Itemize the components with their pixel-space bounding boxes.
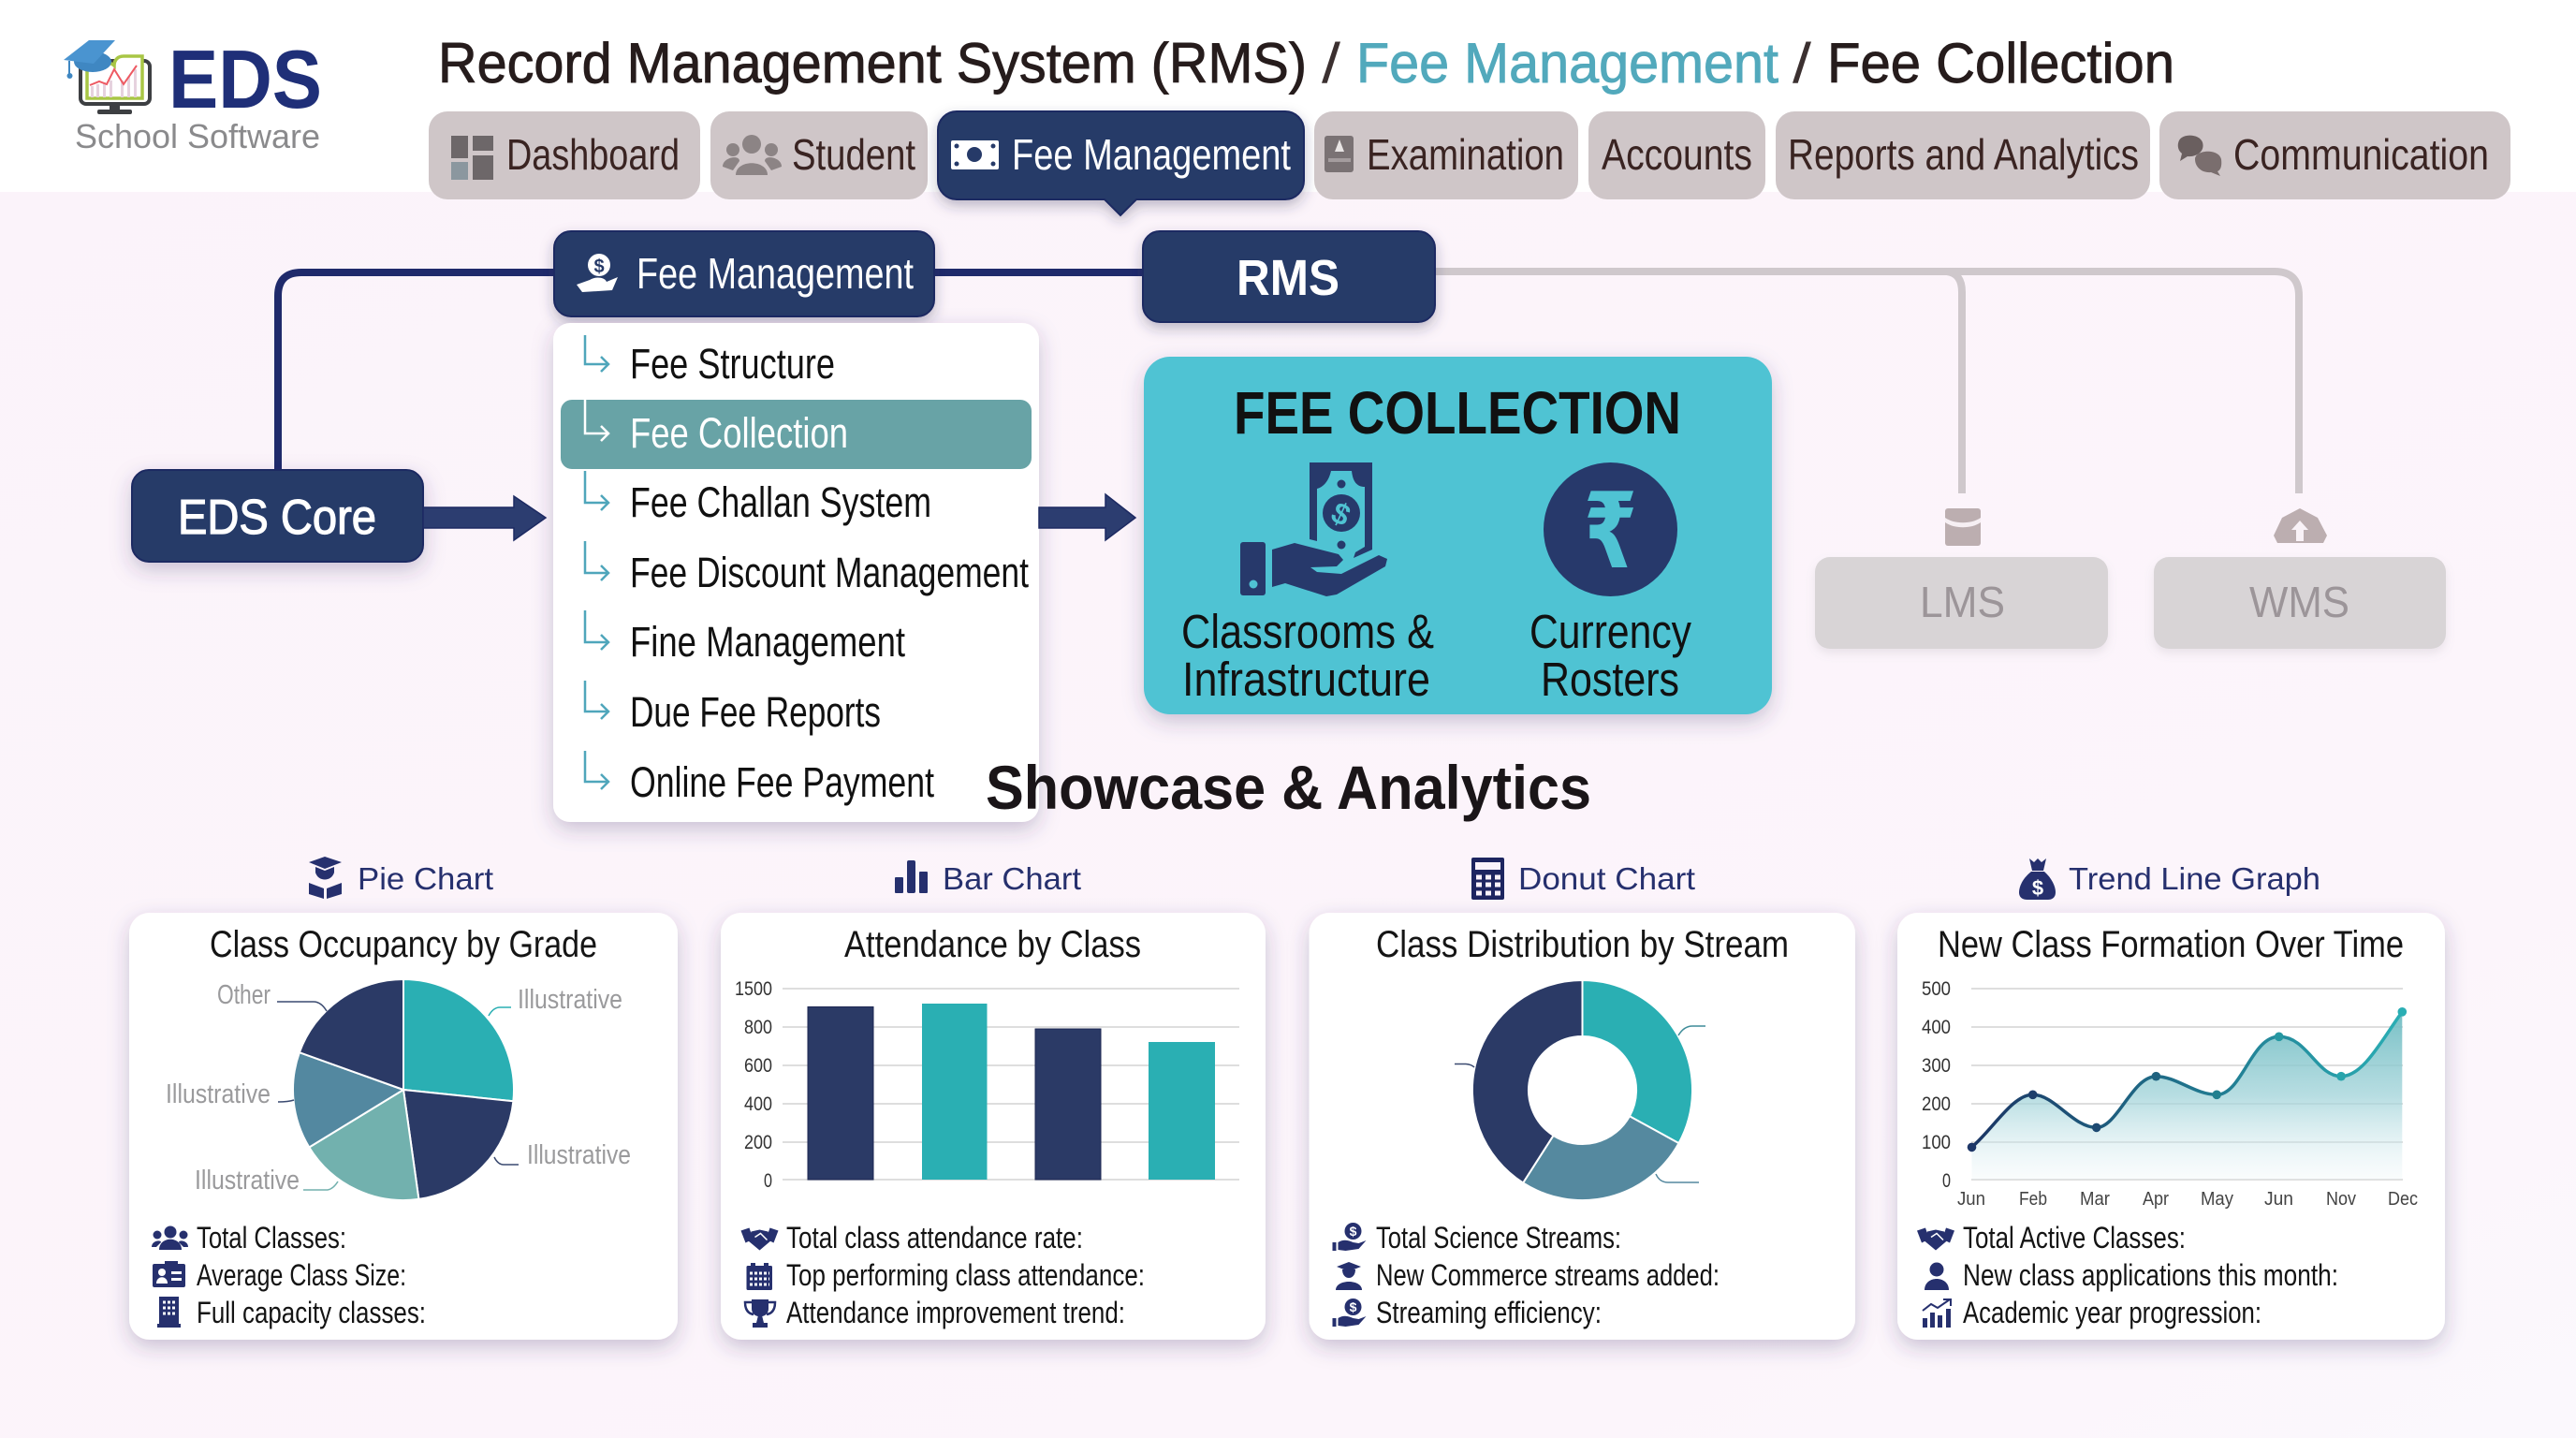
icon: calendar	[747, 1263, 772, 1290]
icon: WMS cloud upload	[2274, 508, 2327, 543]
logo wordmark: EDS	[168, 33, 322, 125]
chart title: Class Occupancy by Grade	[210, 924, 597, 965]
icon: hand holding banknote	[1240, 462, 1387, 596]
panel: fee menu	[553, 323, 1039, 822]
pie labels: Illustrative	[518, 985, 622, 1015]
icon: rupee coin: ₹	[1584, 471, 1637, 593]
icon: handshake	[1917, 1228, 1954, 1251]
tab: Communication: Communication	[2233, 130, 2489, 179]
tab: Reports and Analytics	[1776, 111, 2150, 199]
icon: hand with coin	[577, 254, 618, 292]
line chart: 200	[1922, 1093, 1951, 1115]
stats list	[786, 1221, 1145, 1329]
node: RMS	[1143, 231, 1435, 322]
node: LMS: LMS	[1920, 578, 2005, 626]
connector: RMS to LMS and WMS	[1435, 271, 2299, 493]
stats list: New class applications this month:	[1963, 1258, 2338, 1292]
icon: LMS wallet	[1945, 508, 1981, 546]
stats list: Attendance improvement trend:	[786, 1296, 1125, 1329]
pie labels: Other	[217, 980, 271, 1010]
line chart: May	[2201, 1189, 2233, 1210]
title breadcrumb	[438, 32, 2174, 95]
icon: growth chart	[1923, 1299, 1951, 1328]
title breadcrumb: Fee Management	[1356, 32, 1778, 95]
line chart: 500	[1922, 978, 1951, 1000]
stats list: Streaming efficiency:	[1376, 1296, 1602, 1329]
node: EDS Core: EDS Core	[178, 491, 376, 545]
line chart: 300	[1922, 1055, 1951, 1077]
pie labels: Illustrative	[166, 1079, 271, 1109]
icon: trophy	[745, 1299, 775, 1328]
caption: Bar Chart: Bar Chart	[943, 861, 1081, 896]
stats list: Total Classes:	[197, 1221, 346, 1255]
stats list: Top performing class attendance:	[786, 1258, 1145, 1292]
header band	[0, 0, 2576, 192]
donut chart	[1472, 980, 1692, 1200]
icon: handshake	[741, 1228, 779, 1251]
label: Classrooms and Infrastructure	[1181, 605, 1434, 706]
stats list: Total Active Classes:	[1963, 1221, 2186, 1255]
tab: Student	[710, 111, 928, 199]
bar chart	[735, 978, 1239, 1192]
panel: Class Distribution by Stream	[1309, 913, 1855, 1340]
chart title: Attendance by Class	[844, 924, 1141, 965]
icon: rupee coin	[1544, 462, 1677, 596]
navigation tabs	[429, 111, 2510, 215]
line chart: Jun	[2264, 1189, 2293, 1210]
icon: calculator	[1471, 858, 1504, 900]
menu item: Fee Discount Management: Fee Discount Management	[630, 549, 1029, 596]
menu item: Online Fee Payment: Online Fee Payment	[630, 758, 934, 806]
stats list	[197, 1221, 426, 1329]
bar chart: 0	[764, 1170, 772, 1192]
menu item: Fee Collection: Fee Collection	[630, 409, 848, 457]
icon: person	[1925, 1262, 1949, 1290]
stats list: Total class attendance rate:	[786, 1221, 1083, 1255]
chart title: New Class Formation Over Time	[1938, 924, 2404, 965]
menu highlight: Fee Collection	[561, 400, 1032, 469]
icon: group of people	[152, 1226, 188, 1250]
pie leader lines	[277, 1002, 519, 1190]
stats list	[1963, 1221, 2338, 1329]
icon: money bag	[2019, 858, 2056, 900]
caption: Trend Line Graph: Trend Line Graph	[2069, 861, 2320, 896]
arrow: EDS Core to menu	[423, 496, 546, 540]
icon: hand with coin: $	[1350, 1224, 1357, 1239]
title breadcrumb: /	[1793, 32, 1811, 95]
line chart: Apr	[2143, 1189, 2169, 1210]
panel: New Class Formation Over Time	[1897, 913, 2445, 1340]
label: Currency Rosters: Currency	[1530, 605, 1691, 658]
bar chart: 800	[744, 1017, 772, 1038]
tab: Examination: Examination	[1367, 130, 1564, 179]
title breadcrumb: /	[1322, 32, 1340, 95]
icon: hand with coin: $	[1350, 1299, 1357, 1314]
panel: Attendance by Class	[721, 913, 1266, 1340]
bar chart: 1500	[735, 978, 772, 1000]
icon: hand with coin: $	[593, 257, 605, 277]
tab: Accounts: Accounts	[1602, 130, 1752, 179]
menu item: Fee Challan System	[585, 471, 931, 526]
menu item: Fee Challan System: Fee Challan System	[630, 478, 931, 526]
tab: Communication	[2159, 111, 2510, 199]
node: WMS: WMS	[2249, 578, 2349, 626]
line chart: Feb	[2019, 1189, 2047, 1210]
tab: Dashboard	[429, 111, 700, 199]
heading: FEE COLLECTION	[1234, 379, 1681, 447]
tab: Dashboard: Dashboard	[506, 130, 680, 179]
bar chart: 400	[744, 1093, 772, 1115]
logo: EDS School Software	[64, 33, 322, 155]
icon: hand with coin	[1333, 1223, 1367, 1251]
icon: building	[157, 1297, 181, 1328]
line chart: Mar	[2080, 1189, 2110, 1210]
chart title: Class Distribution by Stream	[1376, 924, 1789, 965]
pie chart	[293, 979, 514, 1200]
line chart: 400	[1922, 1017, 1951, 1038]
tab: Student: Student	[792, 130, 915, 179]
node: EDS Core	[132, 470, 423, 562]
icon: bars	[895, 860, 928, 893]
icon: graduate	[1336, 1262, 1362, 1290]
panel: Class Occupancy by Grade	[129, 913, 678, 1340]
tab: Fee Management active	[938, 111, 1304, 215]
node: LMS	[1815, 557, 2108, 649]
donut leader lines	[1455, 1026, 1705, 1182]
menu item: Fee Discount Management	[585, 541, 1029, 596]
menu item: Online Fee Payment	[585, 751, 934, 806]
panel: FEE COLLECTION	[1144, 357, 1772, 714]
icon: id badge	[153, 1261, 185, 1287]
label: Classrooms and Infrastructure: Classrooms &	[1181, 605, 1434, 658]
menu item: Due Fee Reports	[585, 681, 881, 736]
line chart	[1922, 978, 2418, 1210]
tab: Reports and Analytics: Reports and Analytics	[1788, 130, 2139, 179]
line chart: Nov	[2326, 1189, 2356, 1210]
pie labels	[166, 980, 631, 1196]
pie labels: Illustrative	[527, 1140, 631, 1170]
caption: Pie Chart: Pie Chart	[358, 861, 493, 896]
tab: Fee Management active: Fee Management	[1012, 130, 1291, 179]
bar chart: 600	[744, 1055, 772, 1077]
icon: hand with coin	[1333, 1299, 1367, 1327]
caption: Pie Chart	[309, 857, 493, 899]
menu item: Fee Structure	[585, 335, 835, 388]
title breadcrumb: Record Management System (RMS)	[438, 32, 1307, 95]
line chart: 100	[1922, 1132, 1951, 1153]
stats list: New Commerce streams added:	[1376, 1258, 1720, 1292]
icon: money bag: $	[2032, 876, 2043, 900]
node: Fee Management	[554, 231, 934, 316]
caption: Bar Chart	[895, 860, 1081, 896]
label: Classrooms and Infrastructure: Infrastructure	[1182, 653, 1430, 706]
line chart: 0	[1942, 1170, 1951, 1192]
connector: EDS Core to Fee Management and RMS	[278, 272, 1147, 473]
logo tagline: School Software	[75, 117, 320, 155]
arrow: menu to fee collection	[1039, 494, 1135, 540]
node: WMS	[2154, 557, 2446, 649]
line chart: Jun	[1957, 1189, 1985, 1210]
menu item: Fee Structure: Fee Structure	[630, 340, 835, 388]
icon: monitor with chart and graduation cap	[64, 40, 150, 114]
bar chart: 200	[744, 1132, 772, 1153]
title breadcrumb: Fee Collection	[1827, 32, 2174, 95]
line chart: Dec	[2388, 1189, 2418, 1210]
stats list: Average Class Size:	[197, 1258, 406, 1292]
stats list: Full capacity classes:	[197, 1296, 426, 1329]
tab: Examination	[1314, 111, 1578, 199]
menu item: Due Fee Reports: Due Fee Reports	[630, 688, 881, 736]
pie labels: Illustrative	[195, 1166, 300, 1196]
label: Currency Rosters	[1530, 605, 1691, 706]
caption: Donut Chart	[1471, 858, 1695, 900]
caption: Donut Chart: Donut Chart	[1518, 861, 1695, 896]
icon: student with book	[309, 857, 342, 899]
caption: Trend Line Graph	[2019, 858, 2320, 900]
stats list: Academic year progression:	[1963, 1296, 2261, 1329]
menu item: Fine Management: Fine Management	[630, 618, 905, 666]
menu item: Fee Collection	[585, 400, 848, 457]
node: Fee Management: Fee Management	[637, 249, 914, 298]
tab: Accounts	[1588, 111, 1765, 199]
node: RMS: RMS	[1237, 250, 1339, 306]
menu item: Fine Management	[585, 610, 905, 666]
stats list	[1376, 1221, 1720, 1329]
icon: hand holding banknote: $	[1326, 495, 1355, 533]
section heading: Showcase and Analytics: Showcase & Analytics	[986, 753, 1591, 822]
label: Currency Rosters: Rosters	[1541, 653, 1679, 706]
stats list: Total Science Streams:	[1376, 1221, 1621, 1255]
